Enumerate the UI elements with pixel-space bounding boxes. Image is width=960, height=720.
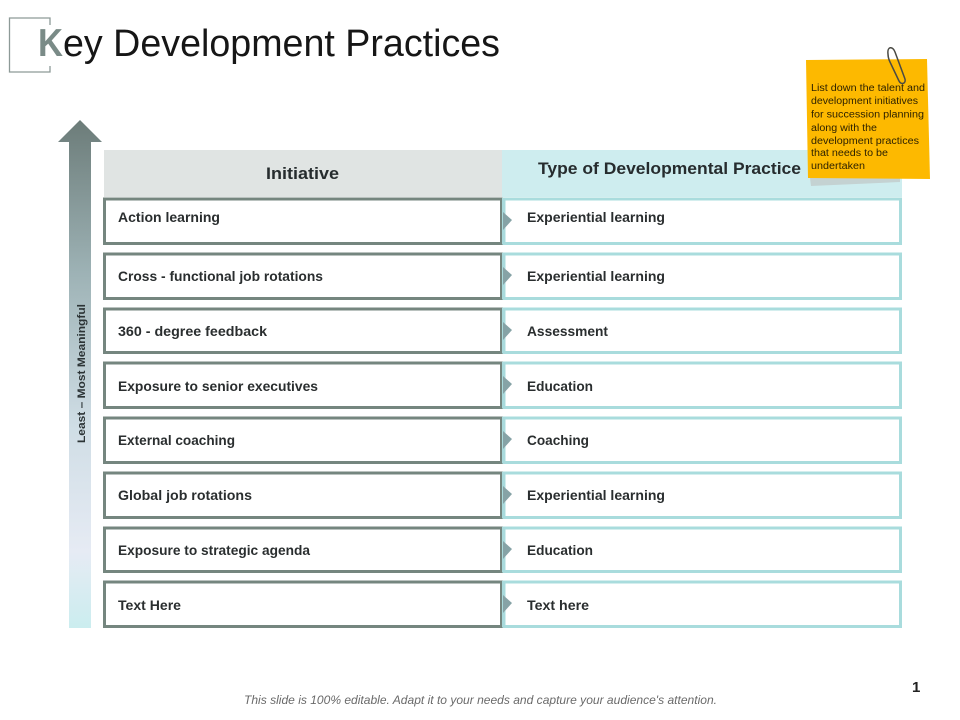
page number: 1 <box>912 679 920 696</box>
icon: paperclip <box>888 48 905 83</box>
sticky note callout: development practices <box>811 136 919 147</box>
sticky note callout: development initiatives <box>811 96 918 107</box>
header: initiative: Initiative <box>266 164 339 183</box>
row 6: Experiential learning <box>527 487 665 503</box>
row 5: External coaching <box>118 432 235 448</box>
header: type of developmental practice: Type of Developmental Practice <box>538 159 801 178</box>
row 2: Experiential learning <box>527 268 665 284</box>
sticky note callout <box>806 48 930 186</box>
footer note: This slide is 100% editable. Adapt it to your needs and capture your audience's attention. <box>244 693 717 707</box>
row 7: Education <box>527 542 593 558</box>
row 1 <box>104 198 900 244</box>
sticky note callout: that needs to be <box>811 148 888 159</box>
row 7: Exposure to strategic agenda <box>118 542 310 558</box>
row 3 <box>104 308 900 353</box>
row 2 <box>104 253 900 299</box>
sticky note callout: for succession planning <box>811 110 924 120</box>
row 5 <box>104 417 900 463</box>
row 6: Global job rotations <box>118 487 252 503</box>
row 7 <box>104 527 900 572</box>
row 1: Action learning <box>118 209 220 225</box>
arrow label: Least – Most Meaningful <box>76 304 88 443</box>
row 2: Cross - functional job rotations <box>118 268 323 284</box>
row 3: 360 - degree feedback <box>118 323 267 339</box>
arrow: least to most meaningful <box>58 120 102 628</box>
header: type of developmental practice <box>502 150 902 197</box>
sticky note callout: undertaken <box>811 161 865 172</box>
row 4: Exposure to senior executives <box>118 378 318 394</box>
sticky note callout: along with the <box>811 123 877 134</box>
row 8: Text Here <box>118 597 181 613</box>
header: initiative <box>104 150 502 197</box>
row 3: Assessment <box>527 323 608 339</box>
row 5: Coaching <box>527 432 589 448</box>
row 1: Experiential learning <box>527 209 665 225</box>
sticky note callout: List down the talent and <box>811 83 925 94</box>
row 6 <box>104 472 900 518</box>
row 8 <box>104 581 900 627</box>
row 8: Text here <box>527 597 589 613</box>
title: ey Development Practices <box>63 23 500 65</box>
title: K <box>38 22 63 65</box>
row 4 <box>104 362 900 408</box>
row 4: Education <box>527 378 593 394</box>
title bracket <box>10 18 50 72</box>
